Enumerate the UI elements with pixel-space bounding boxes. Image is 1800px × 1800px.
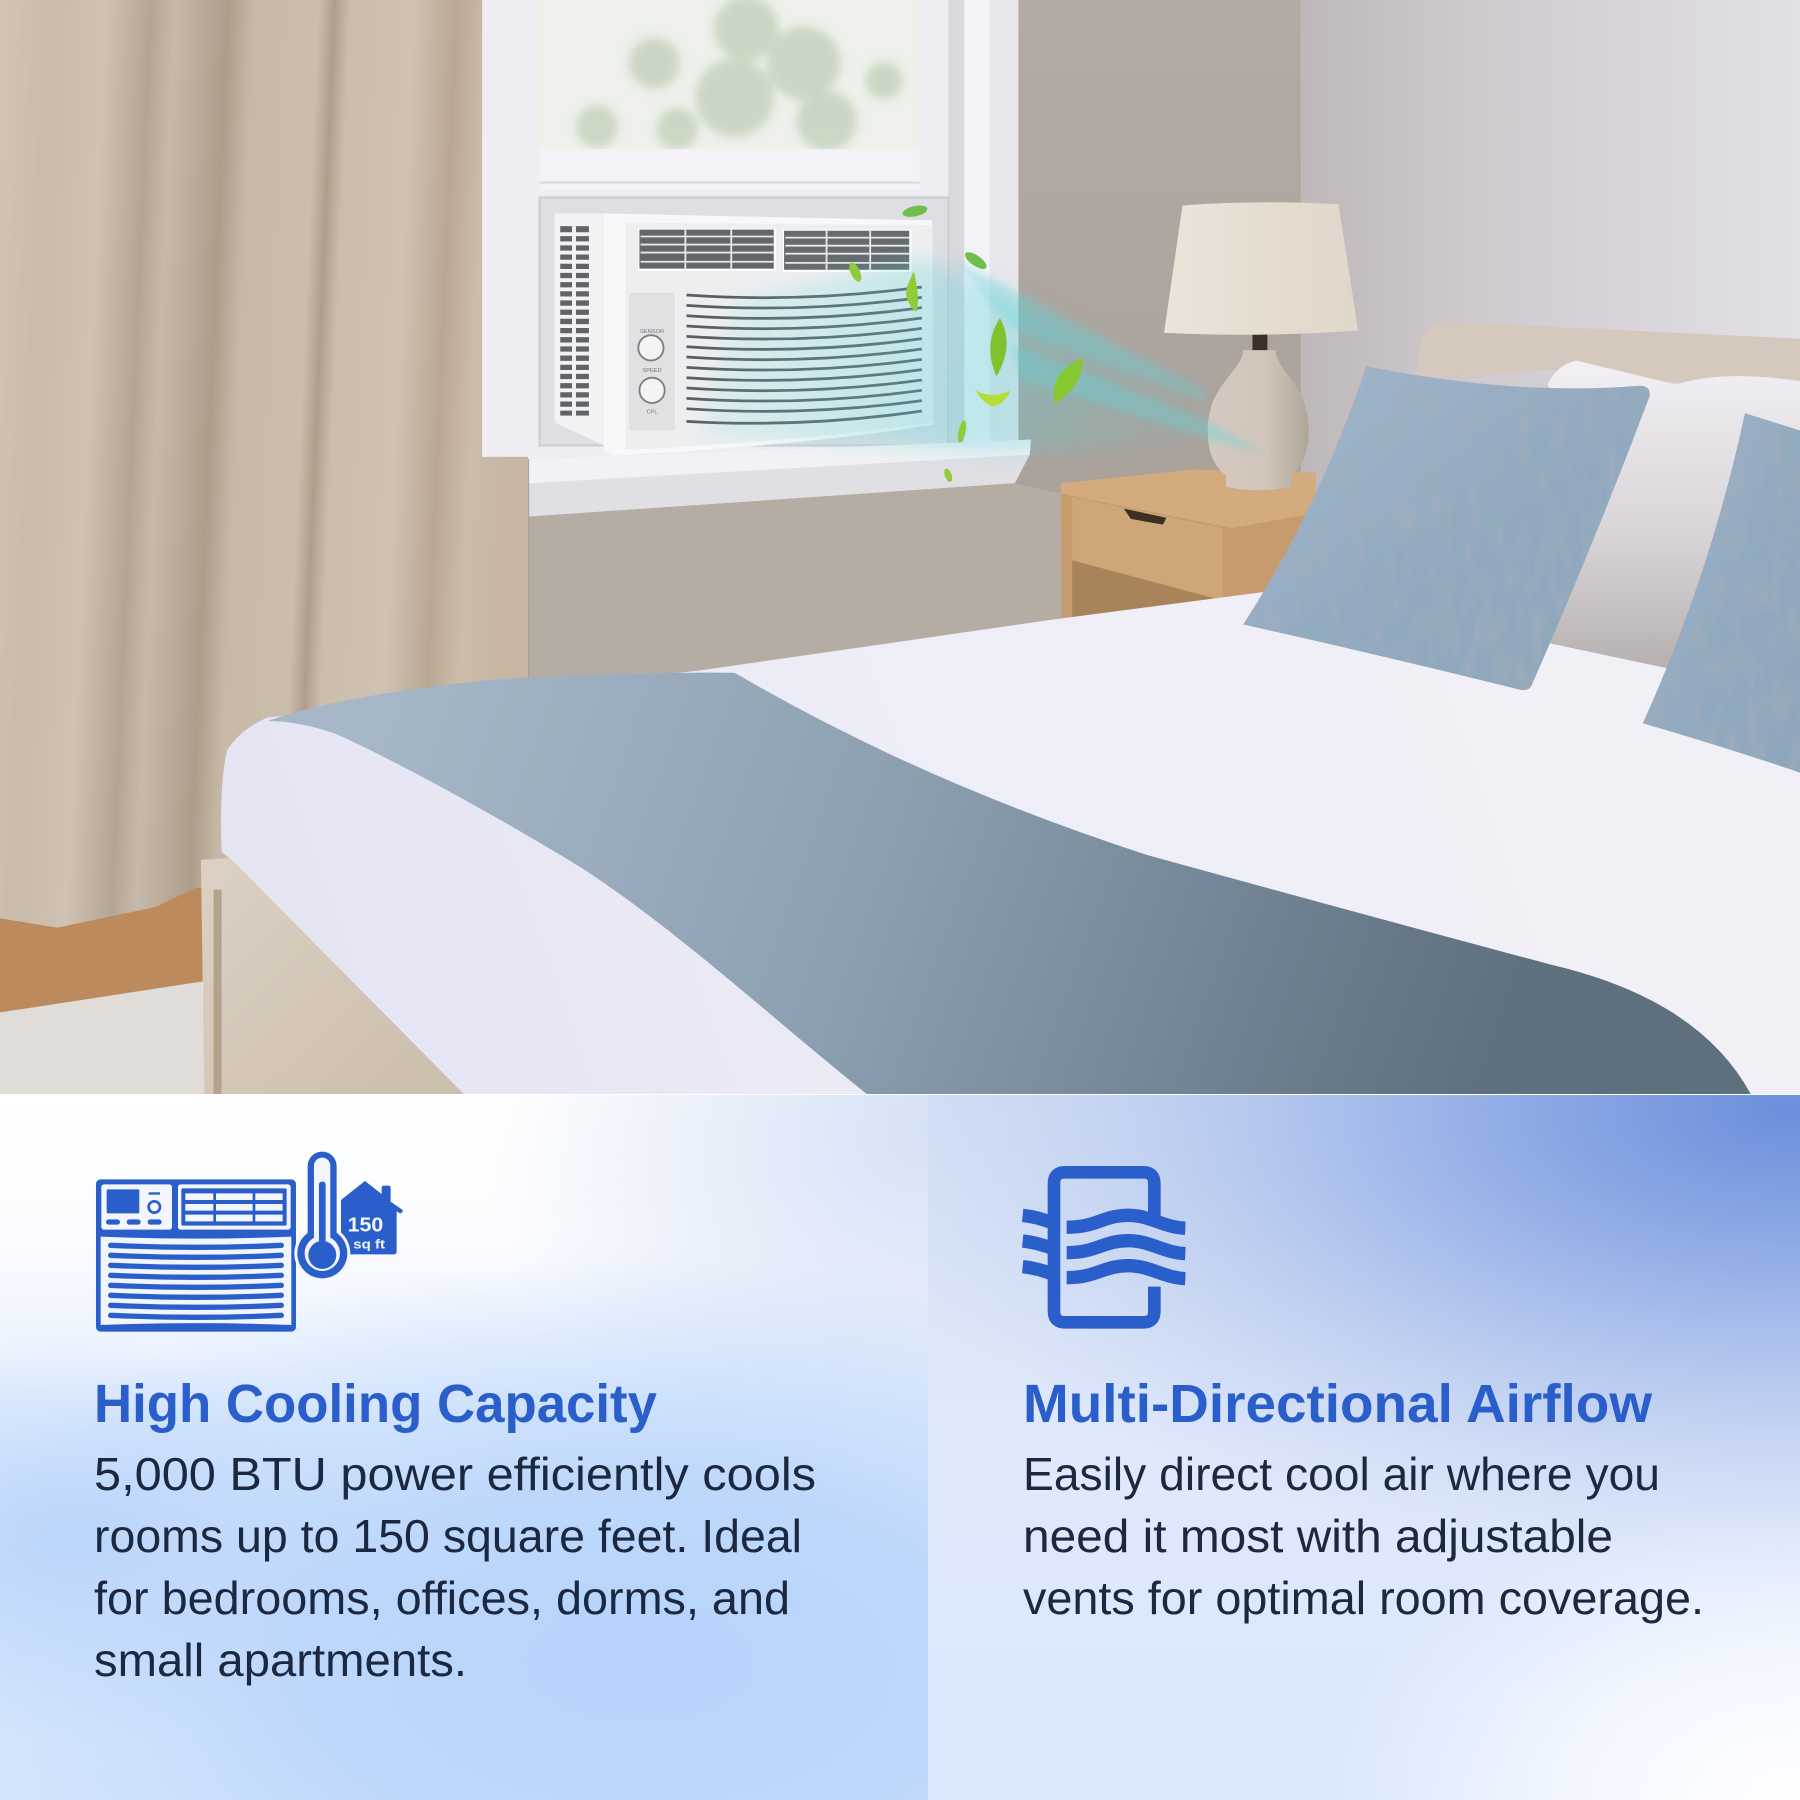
text block: right description: vents for optimal room coverage. bbox=[1023, 1572, 1704, 1624]
text block: left description bbox=[94, 1448, 816, 1686]
drawer bbox=[1072, 497, 1223, 600]
heading: Multi-Directional Airflow: Multi-Directional Airflow bbox=[1023, 1374, 1653, 1434]
pillow: white back bbox=[1548, 360, 1800, 677]
nightstand top bbox=[1061, 470, 1316, 528]
rug bbox=[0, 982, 207, 1094]
pillow: blue right bbox=[1643, 413, 1800, 773]
drawer handle bbox=[1124, 509, 1166, 525]
louvers bbox=[687, 287, 922, 423]
icon: house: 150 bbox=[348, 1214, 383, 1237]
control panel bbox=[629, 293, 675, 430]
headboard bbox=[1414, 321, 1800, 396]
control panel: CFL bbox=[647, 409, 657, 415]
heading: High Cooling Capacity: High Cooling Capacity bbox=[94, 1374, 657, 1434]
panel: right feature background bbox=[928, 1095, 1800, 1800]
airflow bbox=[700, 258, 1263, 453]
icon: AC unit bbox=[96, 1179, 296, 1332]
nightstand underside bbox=[1072, 560, 1223, 618]
window side trim bbox=[920, 0, 1018, 448]
curtain: drape bbox=[0, 0, 528, 928]
control panel: SPEED bbox=[642, 368, 662, 374]
icon: vent outline bbox=[1054, 1172, 1154, 1322]
icon: airflow waves bbox=[1023, 1215, 1185, 1279]
wall: back wall bbox=[505, 0, 1302, 712]
text block: left description: for bedrooms, offices, dorms, and bbox=[94, 1572, 790, 1624]
icon: multi-directional airflow bbox=[1023, 1172, 1185, 1322]
nightstand bbox=[1061, 470, 1316, 620]
top grille left bbox=[638, 228, 776, 271]
text block: right description: Easily direct cool air where you bbox=[1023, 1448, 1660, 1500]
bed frame bbox=[201, 858, 464, 1094]
pillow: blue front bbox=[1243, 366, 1650, 690]
wall: right wall bbox=[1301, 0, 1800, 712]
lamp vase bbox=[1208, 350, 1309, 490]
text block: right description bbox=[1023, 1448, 1704, 1624]
unit side bbox=[554, 214, 604, 445]
bedroom photo scene bbox=[0, 0, 1800, 1094]
window sash rail bbox=[540, 149, 948, 191]
lamp bbox=[1164, 202, 1358, 490]
leaves bbox=[847, 204, 1083, 483]
top grille right bbox=[783, 230, 912, 272]
icon: house: sq ft bbox=[353, 1237, 386, 1251]
text block: right description: need it most with adjustable bbox=[1023, 1510, 1613, 1562]
mattress and sheet bbox=[221, 591, 1800, 1094]
icon: house bbox=[341, 1181, 403, 1254]
icon: air conditioner with thermometer and 150 sq ft house bbox=[96, 1152, 403, 1332]
window glass with tree bbox=[570, 0, 909, 149]
text block: left description: 5,000 BTU power efficiently cools bbox=[94, 1448, 816, 1500]
lamp stem bbox=[1252, 331, 1267, 354]
wall: lower wall under window bbox=[529, 483, 1062, 685]
icon: thermometer bbox=[294, 1152, 350, 1281]
nightstand body bbox=[1061, 470, 1316, 620]
unit front bbox=[604, 214, 933, 456]
panel: left feature background bbox=[0, 1095, 928, 1800]
blanket bbox=[267, 673, 1751, 1094]
text block: left description: small apartments. bbox=[94, 1634, 467, 1686]
air conditioner unit bbox=[554, 214, 933, 456]
control panel: SENSOR bbox=[640, 329, 664, 335]
window sill bbox=[529, 440, 1031, 517]
window bbox=[482, 0, 1031, 517]
lamp shade bbox=[1164, 202, 1358, 335]
text block: left description: rooms up to 150 square feet. Ideal bbox=[94, 1510, 802, 1562]
window frame bbox=[482, 0, 1018, 459]
window opening bbox=[540, 197, 948, 445]
floor bbox=[0, 878, 241, 1013]
